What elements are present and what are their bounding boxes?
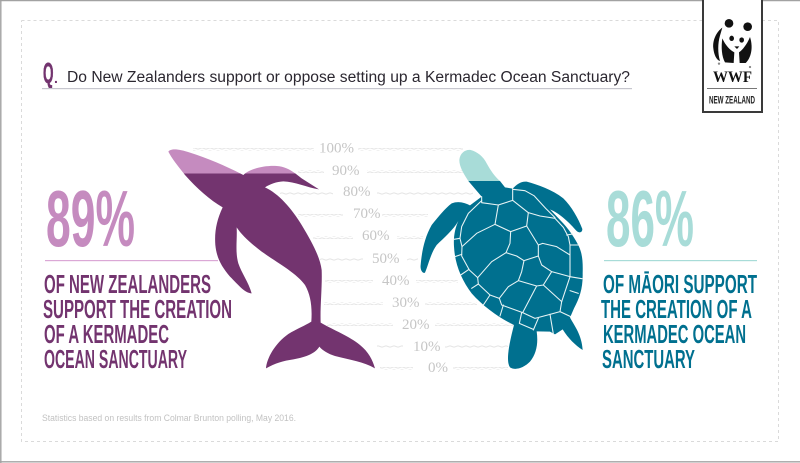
right statistic: 86% xyxy=(601,174,757,374)
WWF logo xyxy=(703,0,762,112)
percentage scale: 30% xyxy=(392,295,420,311)
percentage scale: 90% xyxy=(332,163,360,179)
right statement: SANCTUARY xyxy=(602,344,695,374)
left statement: OF NEW ZEALANDERS xyxy=(44,269,211,299)
source note: Statistics based on results from Colmar Brunton polling, May 2016. xyxy=(42,413,296,423)
question heading: . xyxy=(54,70,58,86)
turtle body xyxy=(421,181,583,369)
percentage scale: 20% xyxy=(402,317,430,333)
right statistic: 86%: 86% xyxy=(606,174,694,263)
left statement: OCEAN SANCTUARY xyxy=(44,344,187,374)
percentage scale: 100% xyxy=(319,140,354,156)
whale chart: 89% filled xyxy=(168,149,375,368)
question heading: Do New Zealanders support or oppose setting up a Kermadec Ocean Sanctuary? xyxy=(67,69,630,86)
question heading: Q xyxy=(43,58,54,90)
WWF logo: WWF xyxy=(713,69,752,86)
question heading xyxy=(42,58,632,90)
percentage scale xyxy=(193,140,515,376)
left statistic: 89% xyxy=(43,174,232,374)
percentage scale: 80% xyxy=(343,184,370,200)
percentage scale: 40% xyxy=(382,273,410,289)
percentage scale: 10% xyxy=(413,339,440,355)
left statement: OF A KERMADEC xyxy=(44,319,169,349)
percentage scale: 50% xyxy=(372,251,400,267)
turtle chart: 86% filled xyxy=(421,150,583,369)
icon: panda xyxy=(713,19,752,68)
turtle head fill level xyxy=(459,150,500,181)
right statement xyxy=(601,269,757,374)
left statistic: 89%: 89% xyxy=(46,174,135,263)
percentage scale: 60% xyxy=(362,228,390,244)
turtle shell lines xyxy=(454,189,582,334)
left statement xyxy=(43,269,232,374)
WWF logo: NEW ZEALAND xyxy=(709,94,755,106)
percentage scale: 0% xyxy=(428,360,448,376)
left statement: SUPPORT THE CREATION xyxy=(43,294,232,324)
percentage scale: 70% xyxy=(353,206,380,222)
